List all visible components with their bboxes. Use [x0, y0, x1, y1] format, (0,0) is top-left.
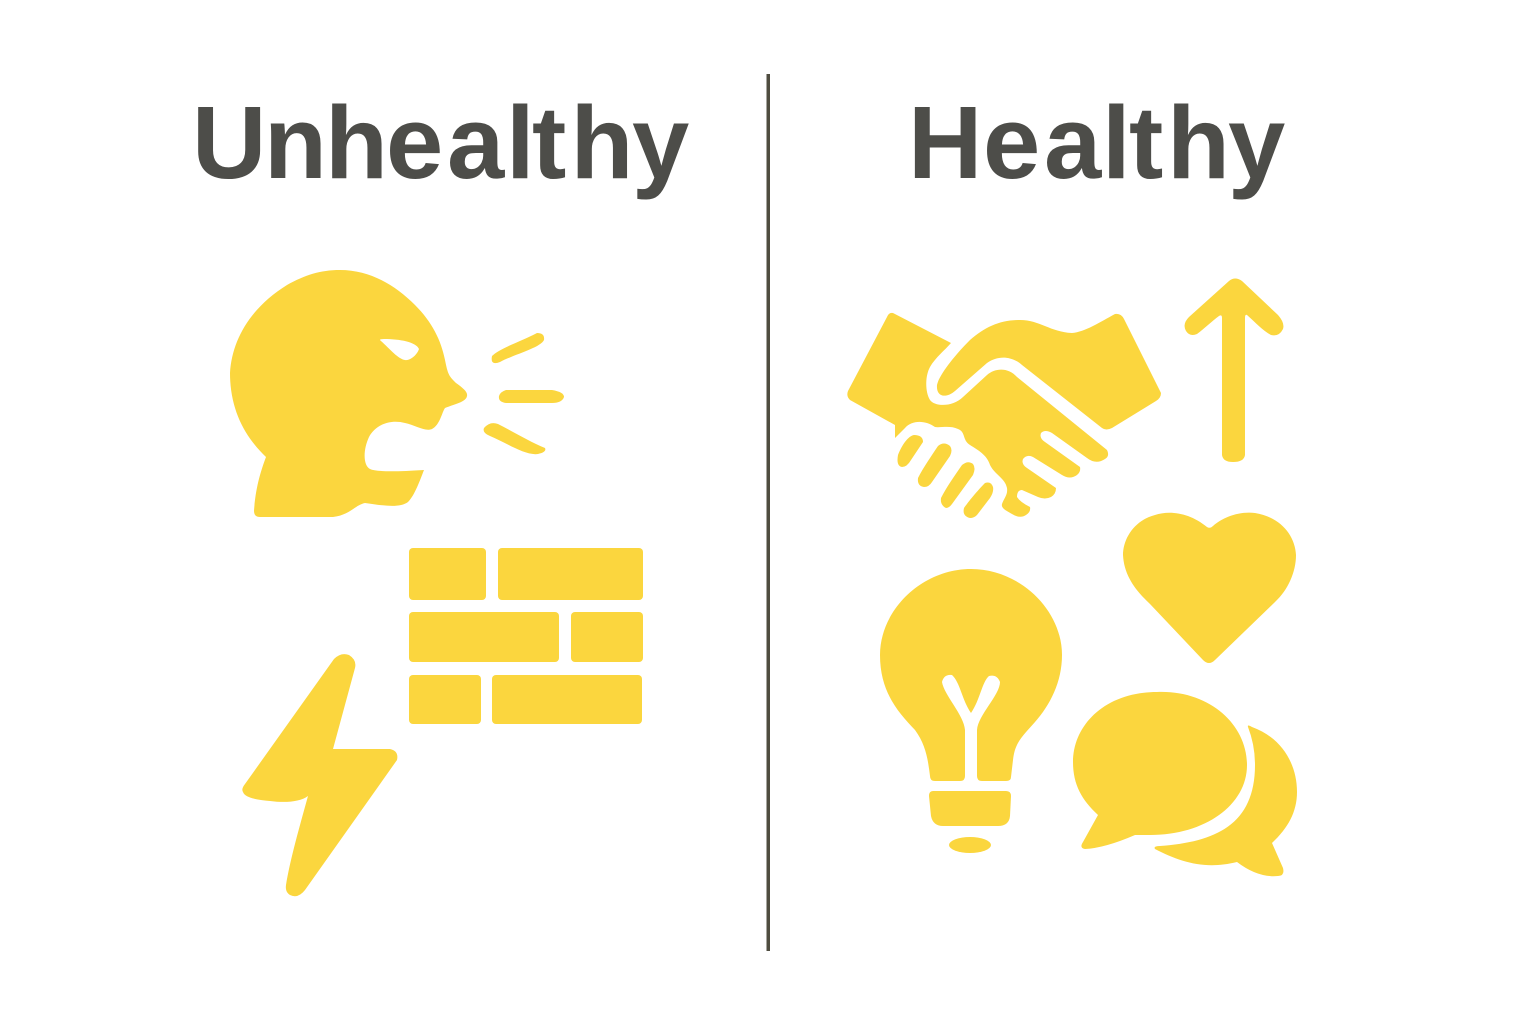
heading: Healthy: Healthy	[908, 85, 1285, 200]
icon: up arrow	[1185, 278, 1283, 462]
center divider	[766, 74, 770, 951]
icon: speech bubbles	[1073, 692, 1297, 876]
icon: light bulb	[880, 569, 1062, 853]
icon: handshake	[847, 313, 1161, 518]
icon: lightning bolt	[242, 654, 397, 896]
icon: shouting head	[230, 270, 564, 517]
icon: brick wall	[409, 548, 643, 724]
icon: heart	[1123, 513, 1296, 663]
heading: Unhealthy: Unhealthy	[192, 85, 689, 200]
